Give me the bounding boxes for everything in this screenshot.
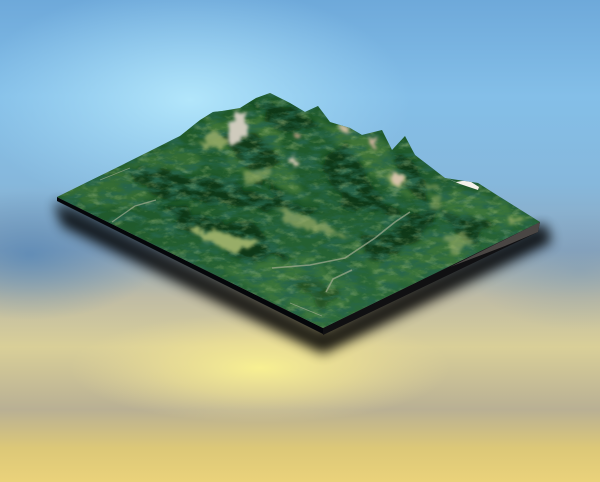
terrain block side walls <box>57 197 540 335</box>
sunlit slopes <box>60 118 530 325</box>
soft shadow under terrain block <box>54 200 552 354</box>
light meadow patches <box>188 130 528 254</box>
valley roads and river <box>100 168 410 316</box>
terrain surface <box>57 93 540 328</box>
dark valley shading <box>130 103 500 312</box>
rock and snow highlights <box>227 113 403 184</box>
snow cap <box>446 178 479 190</box>
noise texture <box>62 93 538 324</box>
